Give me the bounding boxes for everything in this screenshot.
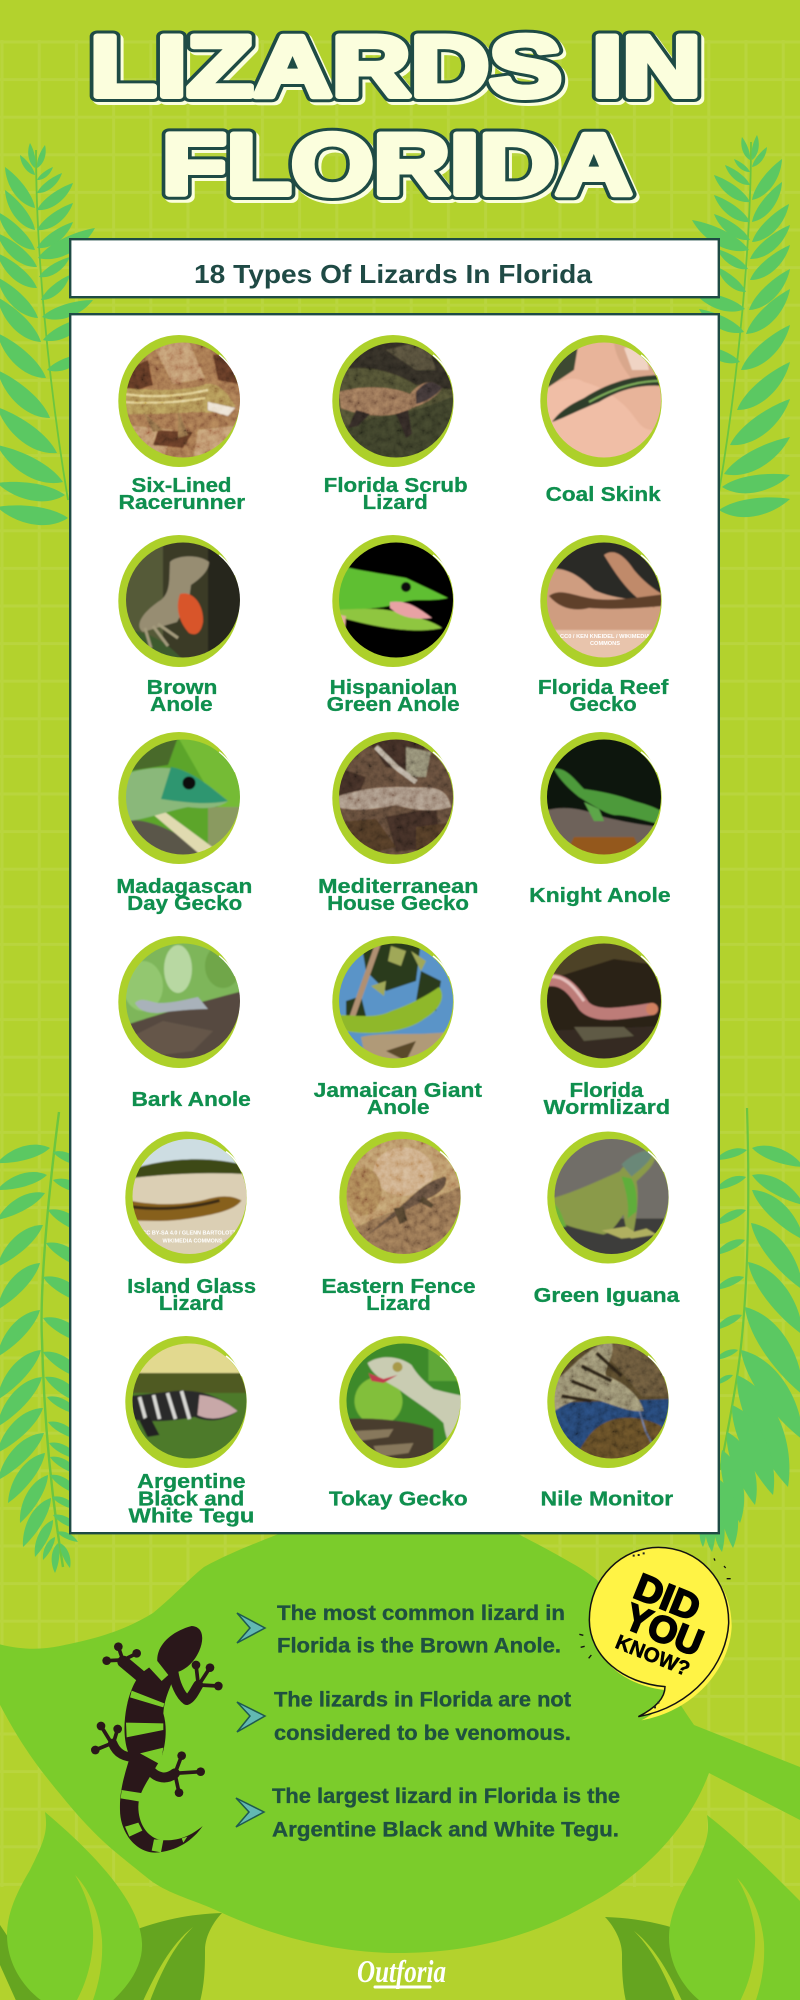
image credit <box>560 634 649 645</box>
label: Green Anole <box>327 694 460 716</box>
label: Tokay Gecko <box>329 1489 468 1511</box>
palm frond: top left <box>0 143 100 529</box>
photo ring <box>125 1336 250 1468</box>
photo ring <box>547 1336 672 1468</box>
panel: lizard grid <box>70 314 719 1533</box>
title: LIZARDS IN <box>90 19 701 115</box>
image credit: CC0 / KEN KNEIDEL / WIKIMEDIA <box>560 634 650 640</box>
label <box>318 876 478 915</box>
fact text <box>272 1785 620 1842</box>
card: Green Iguana <box>534 1132 680 1307</box>
card: Nile Monitor <box>540 1336 673 1511</box>
label <box>544 1080 670 1119</box>
card: Madagascan Day Gecko <box>116 732 252 915</box>
card: Argentine Black and White Tegu <box>125 1336 254 1528</box>
card: Coal Skink <box>540 335 664 506</box>
label: Brown <box>147 677 217 699</box>
leaves: light front leaf, left <box>7 1812 142 2000</box>
fact 3 <box>236 1785 620 1842</box>
photo ring <box>118 732 243 864</box>
image credit: WIKIMEDIA COMMONS <box>162 1238 223 1244</box>
card: Jamaican Giant Anole <box>314 936 482 1119</box>
card: Hispaniolan Green Anole <box>327 535 460 716</box>
label <box>116 876 252 915</box>
label <box>538 677 669 716</box>
fact text <box>274 1689 571 1745</box>
photo ring <box>540 535 664 667</box>
title: FLORIDA <box>165 120 635 216</box>
label: Nile Monitor <box>540 1489 673 1511</box>
leaves: dark back leaves, left <box>0 1913 222 2000</box>
label: Racerunner <box>118 492 245 514</box>
label: Island Glass <box>127 1276 256 1298</box>
arrow <box>237 1613 265 1643</box>
card: Florida Scrub Lizard <box>324 335 468 514</box>
subtitle panel <box>70 239 719 297</box>
photo ring <box>332 335 456 467</box>
image credit <box>144 1230 236 1242</box>
label: Hispaniolan <box>330 677 457 699</box>
label <box>324 475 468 514</box>
title: LIZARDS IN <box>93 22 704 118</box>
leaves: dark back leaves, right <box>605 1917 727 2000</box>
fact text: Argentine Black and White Tegu. <box>272 1819 619 1842</box>
fact text: The lizards in Florida are not <box>274 1689 571 1712</box>
palm frond: top right <box>687 135 798 521</box>
label: Black and <box>138 1489 244 1511</box>
card: Tokay Gecko <box>329 1336 468 1511</box>
label: Coal Skink <box>546 484 662 506</box>
callout: did you know speech bubble <box>579 1547 732 1720</box>
photo ring <box>540 732 664 864</box>
card: Knight Anole <box>529 732 671 907</box>
photo ring <box>125 1132 250 1264</box>
card: Florida Reef Gecko <box>538 535 669 716</box>
subtitle: 18 Types Of Lizards In Florida <box>194 259 593 289</box>
photo ring <box>332 732 456 864</box>
label <box>314 1080 482 1119</box>
title: FLORIDA <box>162 117 632 213</box>
card: Brown Anole <box>118 535 243 716</box>
leaves: light front leaf, right <box>669 1815 800 2000</box>
card: Island Glass Lizard <box>125 1132 256 1315</box>
label: Knight Anole <box>529 885 671 907</box>
card: Eastern Fence Lizard <box>322 1132 476 1315</box>
label: Green Iguana <box>534 1285 680 1307</box>
callout: did you know speech bubble: YOU <box>619 1595 709 1664</box>
card: Bark Anole <box>118 936 251 1111</box>
photo ring <box>339 1132 464 1264</box>
label <box>127 1276 256 1315</box>
label: Wormlizard <box>544 1097 670 1119</box>
photo ring <box>332 535 456 667</box>
label: White Tegu <box>128 1506 254 1528</box>
card: Mediterranean House Gecko <box>318 732 478 915</box>
image credit: CC BY-SA 4.0 / GLENN BARTOLOTTI / <box>142 1230 241 1236</box>
label <box>147 677 217 716</box>
label <box>327 677 460 716</box>
label <box>118 475 245 514</box>
photo ring <box>332 936 456 1068</box>
photo ring <box>118 936 243 1068</box>
label: Mediterranean <box>318 876 478 898</box>
label: Florida Reef <box>538 677 669 699</box>
fact 1 <box>237 1602 565 1658</box>
fact text: The most common lizard in <box>277 1602 565 1625</box>
card: Florida Wormlizard <box>540 936 670 1119</box>
fact text: Florida is the Brown Anole. <box>277 1635 561 1658</box>
callout: did you know speech bubble: KNOW? <box>612 1631 693 1681</box>
title: LIZARDS IN <box>90 19 701 115</box>
label: Eastern Fence <box>322 1276 476 1298</box>
photo ring <box>540 936 664 1068</box>
label: Anole <box>367 1097 430 1119</box>
fact text: The largest lizard in Florida is the <box>272 1785 620 1808</box>
photo ring <box>118 535 243 667</box>
fact 2 <box>237 1689 571 1745</box>
label: Lizard <box>363 492 428 514</box>
photo ring <box>540 335 664 467</box>
label: Gecko <box>570 694 637 716</box>
fact text <box>277 1602 565 1658</box>
callout: did you know speech bubble: DID <box>629 1565 706 1629</box>
label: Anole <box>150 694 213 716</box>
label: Argentine <box>137 1471 246 1493</box>
label <box>322 1276 476 1315</box>
label: Madagascan <box>116 876 252 898</box>
label: Bark Anole <box>132 1089 251 1111</box>
photo ring <box>118 335 243 467</box>
logo: Outforia: Outforia <box>357 1953 446 1989</box>
fact text: considered to be venomous. <box>274 1722 571 1745</box>
photo ring <box>547 1132 672 1264</box>
big green leaf behind facts <box>0 1530 800 1953</box>
label: Lizard <box>366 1293 431 1315</box>
palm frond: bottom left <box>0 1112 95 1573</box>
label: Six-Lined <box>132 475 232 497</box>
icon: gecko silhouette <box>91 1626 223 1853</box>
label <box>128 1471 254 1528</box>
arrow <box>236 1798 264 1827</box>
title <box>90 19 704 216</box>
palm frond: bottom right <box>699 1108 800 1552</box>
photo ring <box>339 1336 464 1468</box>
card: Six-Lined Racerunner <box>118 335 245 514</box>
arrow <box>237 1702 265 1732</box>
label: Lizard <box>159 1293 224 1315</box>
image credit: COMMONS <box>590 641 620 647</box>
label: Florida Scrub <box>324 475 468 497</box>
title: FLORIDA <box>162 117 632 213</box>
label: Jamaican Giant <box>314 1080 482 1102</box>
label: House Gecko <box>327 893 469 915</box>
label: Florida <box>570 1080 644 1102</box>
label: Day Gecko <box>127 893 242 915</box>
